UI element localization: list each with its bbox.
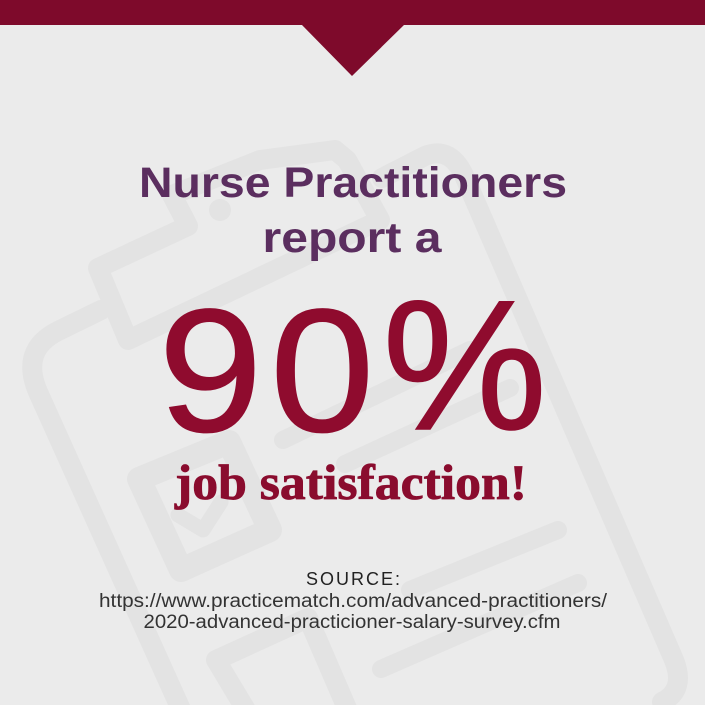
icon: background clipboard watermark bbox=[32, 150, 678, 705]
top bar bbox=[0, 0, 705, 25]
heading: Nurse Practitioners report a bbox=[139, 159, 567, 262]
statistic: 90%: % bbox=[382, 263, 547, 469]
heading: Nurse Practitioners report a: Nurse Practitioners bbox=[139, 159, 567, 207]
heading: Nurse Practitioners report a: report a bbox=[262, 214, 443, 262]
statistic: 90% bbox=[158, 263, 547, 469]
source block: SOURCE: bbox=[306, 569, 400, 589]
icon: downward triangle pointer bbox=[301, 24, 405, 76]
source block bbox=[99, 569, 608, 633]
statistic: 90%: 0 bbox=[270, 274, 374, 469]
subheading: job satisfaction!: job satisfaction! bbox=[174, 454, 527, 510]
statistic: 90%: 9 bbox=[158, 274, 263, 469]
source block: 2020-advanced-practicioner-salary-survey.cfm bbox=[144, 612, 560, 633]
source block: https://www.practicematch.com/advanced-practitioners/ bbox=[99, 591, 608, 612]
